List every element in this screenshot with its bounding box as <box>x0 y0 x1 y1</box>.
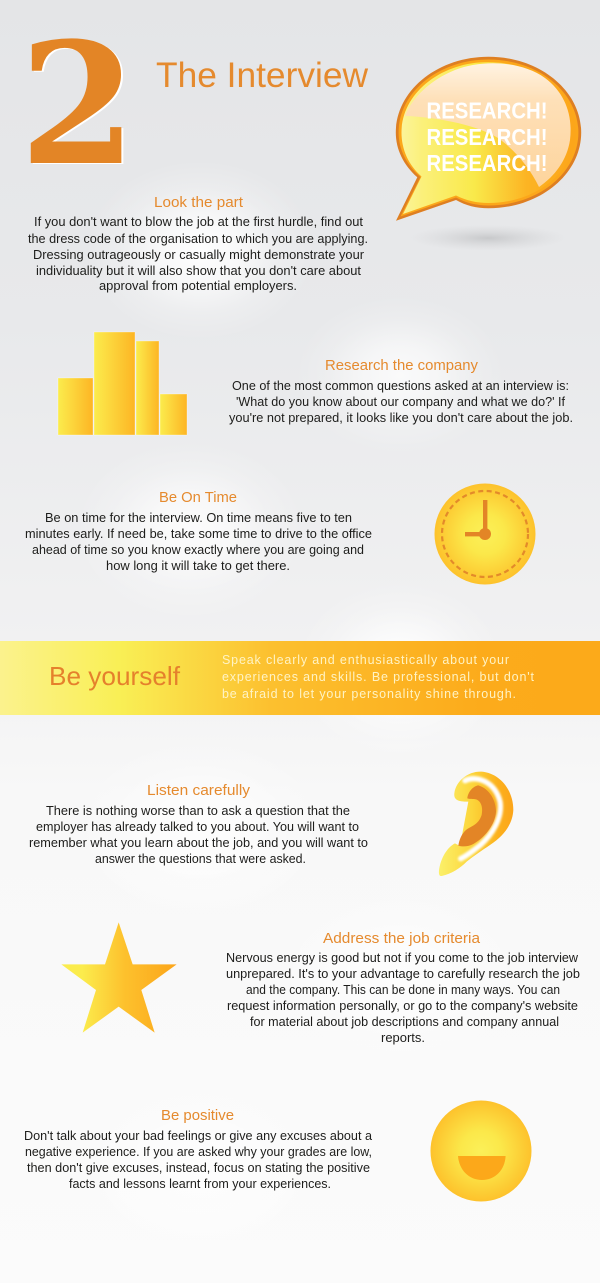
section: research the company <box>229 358 573 425</box>
heading: Research the company <box>325 358 479 374</box>
band text <box>222 653 535 701</box>
speech bubble: research <box>396 57 581 251</box>
heading: Be On Time <box>159 490 237 506</box>
body text: negative experience. If you are asked why your grades are low, <box>25 1145 372 1159</box>
body text: for material about job descriptions and company annual <box>250 1015 559 1029</box>
section: listen carefully <box>29 783 368 866</box>
body text: reports. <box>381 1031 425 1045</box>
body text: unprepared. It's to your advantage to carefully research the job <box>226 967 580 981</box>
body text: you're not prepared, it looks like you don't care about the job. <box>229 411 573 425</box>
icon: star <box>61 922 177 1033</box>
body text: remember what you learn about the job, and you will want to <box>29 836 368 850</box>
body text <box>28 215 368 293</box>
body text: minutes early. If need be, take some time to drive to the office <box>25 527 372 541</box>
icon: ear <box>439 772 513 876</box>
body text <box>25 511 372 573</box>
body text: Be on time for the interview. On time means five to ten <box>45 511 352 525</box>
title: The Interview <box>156 56 369 95</box>
section: be on time <box>25 490 372 573</box>
heading: Address the job criteria <box>323 931 481 947</box>
bubble gloss <box>405 63 571 187</box>
body text <box>24 1129 372 1191</box>
band heading: Be yourself <box>49 661 181 691</box>
body text: approval from potential employers. <box>99 279 297 293</box>
body text: employer has already talked to you about. You will want to <box>36 820 359 834</box>
body text: then don't give excuses, instead, focus on stating the positive <box>27 1161 370 1175</box>
body text <box>226 951 580 1045</box>
icon: smiley <box>430 1100 532 1202</box>
body text: request information personally, or go to the company's website <box>227 999 578 1013</box>
body text: There is nothing worse than to ask a question that the <box>46 804 350 818</box>
section: be positive <box>24 1108 372 1191</box>
section: address the job criteria <box>226 931 580 1045</box>
heading: Look the part <box>154 195 243 211</box>
body text: facts and lessons learnt from your experiences. <box>69 1177 331 1191</box>
bubble text: RESEARCH! <box>426 98 548 124</box>
band text: Speak clearly and enthusiastically about your <box>222 653 509 667</box>
body text: answer the questions that were asked. <box>95 852 306 866</box>
big numeral 2: 2 <box>20 5 136 203</box>
section: look the part <box>28 195 368 293</box>
body text: ahead of time so you know exactly where you are going and <box>32 543 364 557</box>
body text: If you don't want to blow the job at the first hurdle, find out <box>34 215 364 229</box>
body text <box>29 804 368 866</box>
body text: One of the most common questions asked at an interview is: <box>232 379 569 393</box>
speech bubble: research: RESEARCH! <box>426 150 548 176</box>
body text: how long it will take to get there. <box>106 559 290 573</box>
body text: individuality but it will also show that you don't care about <box>36 264 362 278</box>
speech bubble: research: RESEARCH! <box>426 124 548 150</box>
heading: Listen carefully <box>147 783 251 799</box>
band text: experiences and skills. Be professional, but don't <box>222 670 535 684</box>
bubble body <box>396 57 581 221</box>
body text: Dressing outrageously or casually might demonstrate your <box>33 248 364 262</box>
body text: and the company. This can be done in many ways. You can <box>246 983 560 997</box>
big numeral 2: 2 <box>22 6 138 204</box>
body text: 'What do you know about our company and what we do?' If <box>236 395 566 409</box>
icon: clock <box>434 484 536 584</box>
bubble shadow <box>410 225 566 251</box>
band: be yourself <box>0 641 600 715</box>
heading: Be positive <box>161 1108 234 1124</box>
body text <box>229 379 573 425</box>
icon: bar chart <box>58 332 187 435</box>
body text: the dress code of the organisation to which you are applying. <box>28 232 368 246</box>
band text: be afraid to let your personality shine through. <box>222 687 516 701</box>
body text: Nervous energy is good but not if you come to the job interview <box>226 951 579 965</box>
body text: Don't talk about your bad feelings or give any excuses about a <box>24 1129 372 1143</box>
